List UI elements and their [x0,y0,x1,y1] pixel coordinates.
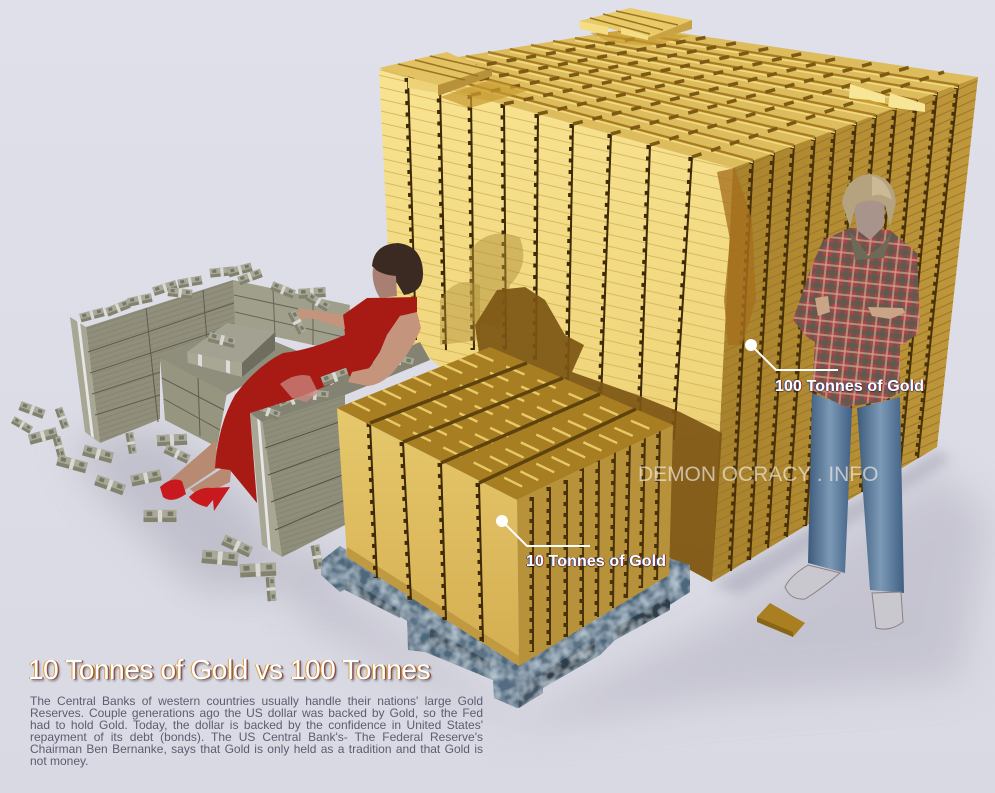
arms [298,308,421,386]
description text: not money. [30,754,88,768]
description text: repayment of its debt (bonds). The US Central Bank's- The Federal Reserve's [30,730,483,744]
leader line: 100 tonnes [745,339,838,370]
cube top face [379,27,978,168]
cube left face [379,70,756,582]
woman in red dress [160,243,423,511]
extra bars on top, right [848,84,925,118]
wooden pallet [321,546,690,708]
extra bars on top, left stack [379,52,530,108]
dress [215,297,417,503]
leader line: 10 tonnes [496,515,590,546]
legs [163,440,232,497]
small cube left face [337,408,519,666]
description text: Chairman Ben Bernanke, says that Gold is only held as a tradition and that Gold is [30,742,483,756]
pallet openings [543,597,670,687]
description text [30,694,483,768]
scattered bills on the floor [11,401,323,601]
shirt [793,228,920,407]
description text: The Central Banks of western countries usually handle their nations' large Gold [30,694,483,708]
cube right face [712,77,978,582]
head [842,174,896,240]
extra bars on top, back stack [579,8,692,46]
jeans [808,393,904,593]
description text: had to hold Gold. Today, the dollar is backed by the confidence in United States' [30,718,483,732]
watermark: DEMON OCRACY . INFO [638,463,878,486]
money block, front [250,342,430,557]
small cube top face [337,347,673,500]
label: 10 tonnes: 10 Tonnes of Gold [526,553,666,570]
10 tonnes gold cube [337,347,673,666]
description text: Reserves. Couple generations ago the US dollar was backed by Gold, so the Fed [30,706,483,720]
money wall, left [70,280,237,443]
head [372,243,423,298]
100 tonnes gold cube [379,8,978,582]
hands [815,296,905,319]
stacks of money couch [70,263,430,557]
title: 10 Tonnes of Gold vs 100 Tonnes [28,654,430,685]
small cube right face [517,423,673,666]
shadows on the cube [440,168,756,582]
sneakers [785,565,903,629]
man in plaid shirt [757,174,920,637]
gold bar on the floor [757,603,805,637]
label: 100 tonnes: 100 Tonnes of Gold [775,378,924,395]
money wall, back [233,280,350,352]
money pile on the seat [187,323,275,377]
floor shadows [70,425,990,730]
red shoes [160,479,230,511]
bills on top of the money stacks [79,263,414,420]
money seat [160,325,300,447]
